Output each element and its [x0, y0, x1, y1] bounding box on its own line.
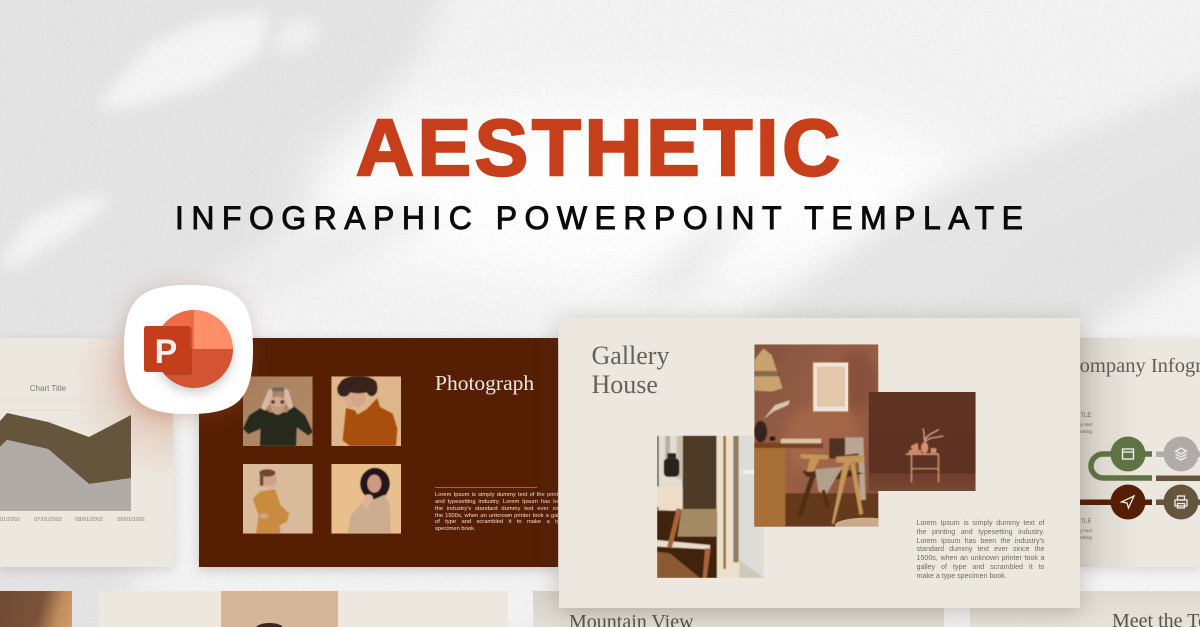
subtitle: Infographic PowerPoint Template: INFOGRAPHIC POWERPOINT TEMPLATE: [175, 200, 1023, 236]
text block: gallery description: 1500s, when an unknown printer took a: [916, 554, 1044, 562]
photo: man with hand goggles: [243, 376, 313, 446]
shadow cast by gallery slide: [1079, 338, 1139, 567]
divider: [435, 487, 537, 488]
icon: printer: [1164, 484, 1198, 520]
wall frame: [812, 362, 849, 413]
bottom slide: portrait card: [99, 591, 508, 627]
chart: area chart: 08/01/2002: [75, 517, 103, 523]
portrait photo fragment: [221, 591, 338, 627]
icon: layers: [1164, 436, 1198, 472]
bottom slide: photo fragment: [0, 591, 72, 627]
connector: olive bar: [1156, 476, 1200, 481]
panel: Gallery House slide: [558, 318, 1080, 608]
text block: gallery description: galley of type and scrambled it to: [916, 563, 1044, 571]
hair fragment: [256, 623, 283, 627]
photo: window and rattan chair: [657, 436, 764, 578]
logo: pie disc: [155, 310, 233, 388]
photo: woman in mustard sweater: [243, 464, 313, 534]
logo: P tile: P: [155, 333, 177, 371]
text block: gallery description: Lorem Ipsum is simply dummy text of: [916, 519, 1044, 527]
heading: Photograph: Photograph: [435, 371, 534, 395]
chart: area chart: 07/01/2002: [34, 517, 62, 523]
connector: gray stub: [1156, 452, 1200, 457]
text block: gallery description: make a type specimen book.: [916, 572, 1007, 580]
icon: window: [1110, 436, 1146, 472]
icon: send arrow: [1110, 484, 1146, 520]
panel: Photograph slide: [199, 338, 558, 567]
photo: room with desk and chair: [754, 344, 878, 527]
heading: Gallery House: Gallery: [592, 341, 669, 370]
text: top description: [1079, 423, 1092, 435]
photo: side table on brown: [869, 392, 976, 491]
chart: area chart: Chart Title: [30, 384, 67, 393]
connector: green loop: [1091, 454, 1152, 478]
photo: curly-haired man in rust sweater: [331, 376, 401, 446]
heading: Gallery House: House: [592, 370, 658, 399]
panel: Company Infographic slide: [1079, 338, 1200, 567]
heading: Gallery House: [592, 341, 670, 399]
connector: brown line: [1080, 500, 1152, 505]
chart: area chart: 09/01/2002: [117, 517, 145, 523]
text: bottom description: [1079, 529, 1092, 541]
icon: PowerPoint app badge: [111, 276, 262, 429]
bottom slide: Mountain View: [533, 591, 944, 627]
panel: chart slide: [0, 338, 173, 567]
chart: area chart: [0, 338, 173, 523]
photos: four portraits: [243, 376, 401, 534]
connector: olive stub: [1156, 500, 1200, 505]
photo: woman in beige sweater: [331, 464, 401, 534]
photos: gallery collage: [657, 344, 976, 578]
text block: gallery description: [916, 519, 1044, 580]
title: AESTHETIC: AESTHETIC: [356, 103, 840, 192]
text block: gallery description: the printing and typesetting industry.: [916, 528, 1044, 536]
text block: photograph description: [435, 492, 558, 532]
text block: gallery description: Lorem Ipsum has been the industry's: [916, 537, 1044, 545]
text block: gallery description: standard dummy text ever since the: [916, 545, 1044, 553]
bottom slide: Meet the Team: [970, 591, 1200, 627]
badge: white squircle: [124, 285, 253, 414]
text block: photograph description: specimen book.: [435, 526, 476, 532]
